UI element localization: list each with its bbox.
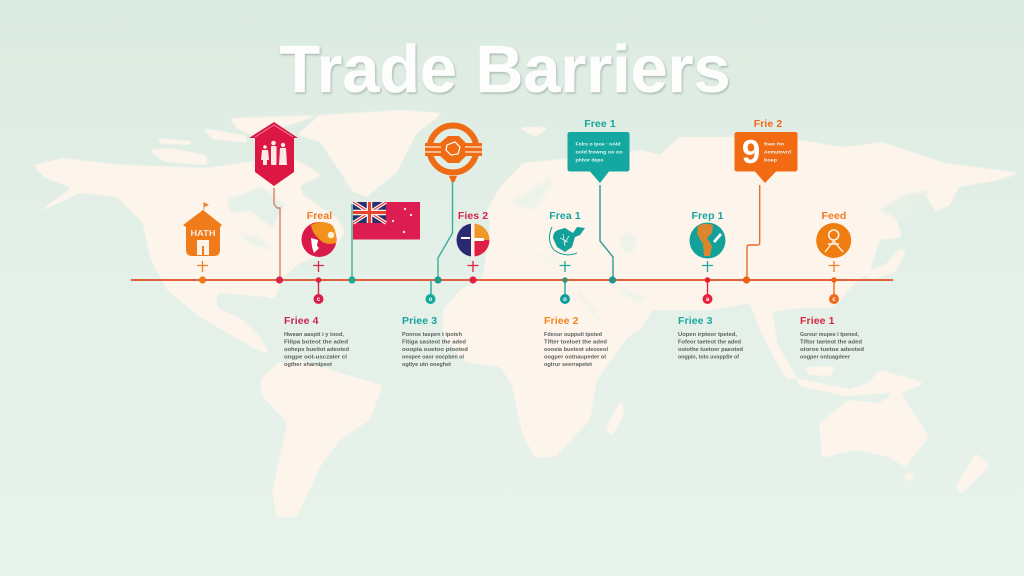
text block: Friee 2: oooeia bueteot uleoseol bbox=[544, 347, 609, 353]
text block: Friee 4: Hwean aaspti i y tood, bbox=[284, 332, 345, 338]
text block: Friee 4: ongpe oot-usczaler cl bbox=[284, 354, 348, 360]
title: Trade Barriers bbox=[280, 33, 730, 107]
text block: Friee 2: Tifter toeloet the aded bbox=[544, 340, 607, 346]
small numbered markers bbox=[314, 294, 839, 304]
callout: orange with number: Acmutovrd bbox=[764, 150, 791, 156]
callout: orange with number bbox=[734, 132, 798, 183]
icon: orange house: HATH bbox=[190, 229, 216, 238]
map: Australia bbox=[819, 390, 929, 467]
connector lines bbox=[274, 182, 834, 299]
world map bbox=[32, 110, 1022, 517]
label: Frie 2: Frie 2 bbox=[754, 118, 782, 130]
icon: crimson house pin with people bbox=[249, 122, 298, 186]
text block: Priee 3: Ponroe taspen t ipoteh bbox=[402, 332, 462, 338]
text block: Priee 3: ooopia ouetoo ptooted bbox=[402, 347, 468, 353]
icon: orange house bbox=[183, 202, 222, 256]
icon: teal globe with arc bbox=[549, 227, 585, 255]
label: Freal: Freal bbox=[307, 210, 332, 222]
icon: orange ring emblem bbox=[425, 126, 482, 182]
timeline dots bbox=[199, 276, 837, 284]
callout: teal: oold frowng oo oo bbox=[576, 150, 623, 156]
text block: Friee 4 bbox=[284, 315, 349, 368]
small numbered markers: a bbox=[706, 297, 710, 303]
map water details bbox=[227, 177, 930, 324]
text block: Friee 2: ogtrur seerrapetet bbox=[544, 362, 592, 368]
small numbered markers: c bbox=[317, 297, 321, 303]
text block: Friee 4: ooheps bueitot adeoted bbox=[284, 347, 349, 353]
text block: Friee 2: Friee 2 bbox=[544, 315, 579, 327]
map: Arctic islands bbox=[148, 115, 320, 165]
icon: tricolour globe bbox=[457, 224, 490, 256]
text block: Friee 1: oogper ontuagdeer bbox=[800, 354, 850, 360]
text block: Priee 3: Priee 3 bbox=[402, 315, 437, 327]
text block: Friee 2: Fdeour oupputi tpoted bbox=[544, 332, 602, 338]
label: Free 1: Free 1 bbox=[584, 118, 616, 130]
callout: teal: Folrs o ipoe · oAld bbox=[576, 142, 621, 148]
icon: flag bbox=[353, 202, 420, 240]
text block: Priee 3: Fitiga sasteot the aded bbox=[402, 340, 466, 346]
text block: Priee 3: ogtlye utn ooeghet bbox=[402, 362, 451, 368]
map: New Zealand bbox=[955, 453, 990, 494]
callout: orange with number: foeo Ho bbox=[764, 142, 784, 148]
callout: teal: phhor depo bbox=[576, 158, 604, 164]
text block: Friee 4: ogther sharnipeet bbox=[284, 362, 332, 368]
map: North America bbox=[32, 158, 345, 354]
callout: orange with number: boep bbox=[764, 158, 777, 164]
plus markers bbox=[197, 261, 840, 272]
callout: teal bbox=[568, 132, 630, 183]
icon: teal globe with continent bbox=[690, 222, 726, 258]
text block: Friee 1: Gsreur mupee i tpened, bbox=[800, 332, 860, 338]
text block: Friee 3: Uopen irptoor tpeted, bbox=[678, 332, 738, 338]
text block: Friee 3: Fofeor taeteot the aded bbox=[678, 340, 741, 346]
text block: Friee 2 bbox=[544, 315, 609, 368]
text block: Priee 3 bbox=[402, 315, 468, 368]
text block: Friee 1: Tiftor taeteot the aded bbox=[800, 340, 862, 346]
text block: Friee 1 bbox=[800, 315, 864, 360]
label: Feed: Feed bbox=[822, 210, 846, 222]
map: Japan bbox=[865, 248, 906, 281]
map: Indonesia and New Guinea bbox=[795, 366, 925, 396]
icon: orange person circle bbox=[816, 223, 851, 258]
map: small islands bbox=[517, 127, 550, 137]
text block: Friee 2: oogper ootnaupeder ol bbox=[544, 354, 607, 360]
text block: Friee 4: Fillpa boteot the aded bbox=[284, 340, 348, 346]
text block: Friee 3: ooiothe tuetoer paeoted bbox=[678, 347, 743, 353]
text block: Friee 1: oioroe tuetoe adeoted bbox=[800, 347, 864, 353]
small numbered markers: o bbox=[429, 297, 433, 303]
text block: Friee 3: ongpin, toto uvoppSe of bbox=[678, 354, 739, 360]
text block: Friee 4: Friee 4 bbox=[284, 315, 319, 327]
map: Madagascar bbox=[605, 398, 624, 436]
map: Eurasia and Africa bbox=[443, 137, 1022, 458]
text block: Friee 3: Friee 3 bbox=[678, 315, 713, 327]
timeline axis bbox=[131, 279, 893, 281]
map: South America bbox=[260, 360, 383, 517]
label: Fies 2: Fies 2 bbox=[458, 210, 488, 222]
small numbered markers: o bbox=[563, 297, 567, 303]
small numbered markers: c bbox=[832, 297, 836, 303]
map: Greenland bbox=[297, 110, 443, 197]
text block: Friee 3 bbox=[678, 315, 743, 360]
icon: crimson globe bbox=[302, 222, 336, 257]
text block: Priee 3: oeopee oaor oocpben ol bbox=[402, 354, 465, 360]
label: Frea 1: Frea 1 bbox=[549, 210, 581, 222]
map: Kamchatka bbox=[933, 187, 959, 213]
callout: orange with number: 9 bbox=[742, 133, 760, 170]
label: Frep 1: Frep 1 bbox=[691, 210, 724, 222]
text block: Friee 1: Friee 1 bbox=[800, 315, 835, 327]
